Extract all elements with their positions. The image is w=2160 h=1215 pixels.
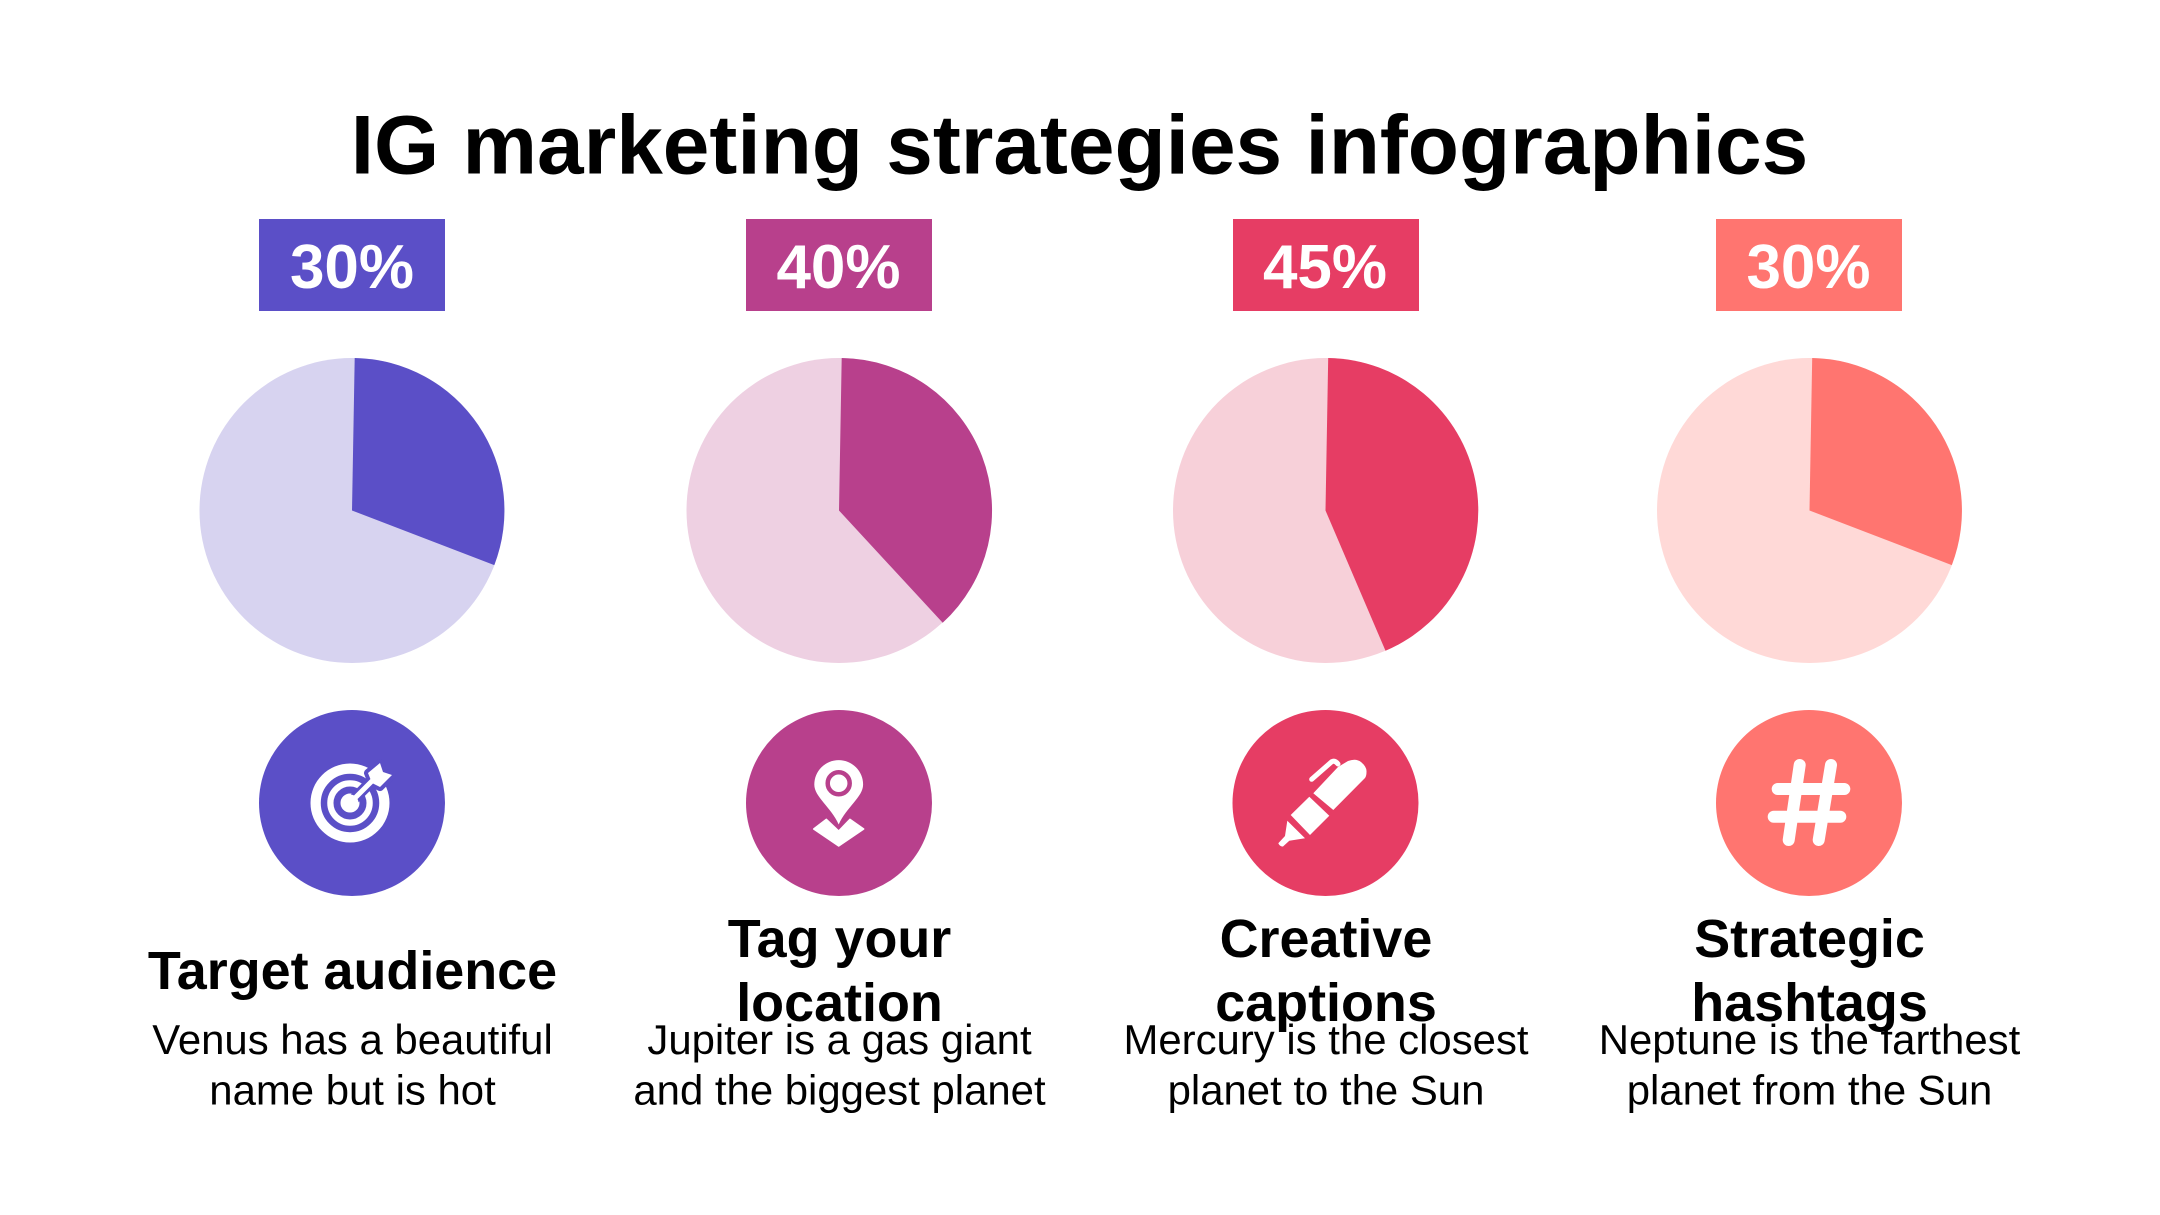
description: and the biggest planet [633,1066,1046,1114]
percentage badge: 30%: 30% [290,233,414,302]
heading [1691,909,1928,1033]
description [152,1016,553,1114]
icon: hashtag [1716,710,1902,896]
percentage badge: 30%: 30% [1746,233,1871,302]
description: Jupiter is a gas giant [647,1016,1032,1063]
heading: Strategic [1694,909,1925,969]
panel: target audience [148,219,557,1114]
heading: captions [1215,973,1437,1033]
panel: creative captions [1123,219,1529,1114]
heading [1215,909,1437,1033]
heading [728,909,951,1033]
heading: location [736,973,943,1033]
description: name but is hot [209,1066,496,1114]
heading: Creative [1220,909,1432,969]
panel: tag your location [633,219,1046,1114]
title: IG marketing strategies infographics [351,98,1808,192]
icon: target with arrow [259,710,445,896]
description: planet from the Sun [1627,1066,1992,1114]
percentage badge: 45% [1233,219,1419,311]
pie chart: 45% [1173,358,1478,663]
percentage badge: 45%: 45% [1263,233,1387,302]
pie chart: 40% [686,358,992,663]
percentage badge: 30% [1716,219,1902,311]
description [1599,1016,2021,1114]
description: planet to the Sun [1168,1066,1484,1114]
pie chart: 30% [200,358,504,663]
description [1123,1016,1529,1114]
description: Neptune is the farthest [1599,1016,2021,1063]
pie chart: 30% [1657,358,1962,663]
icon: location pin [746,710,932,896]
icon: marker pen [1232,710,1418,896]
description [633,1016,1046,1114]
percentage badge: 40% [746,219,932,311]
percentage badge: 30% [259,219,445,311]
panel: strategic hashtags [1599,219,2021,1114]
percentage badge: 40%: 40% [776,233,901,302]
description: Mercury is the closest [1123,1016,1529,1063]
heading: hashtags [1691,973,1928,1033]
heading: Target audience [148,941,557,1001]
heading: Tag your [728,909,951,969]
description: Venus has a beautiful [152,1016,553,1063]
